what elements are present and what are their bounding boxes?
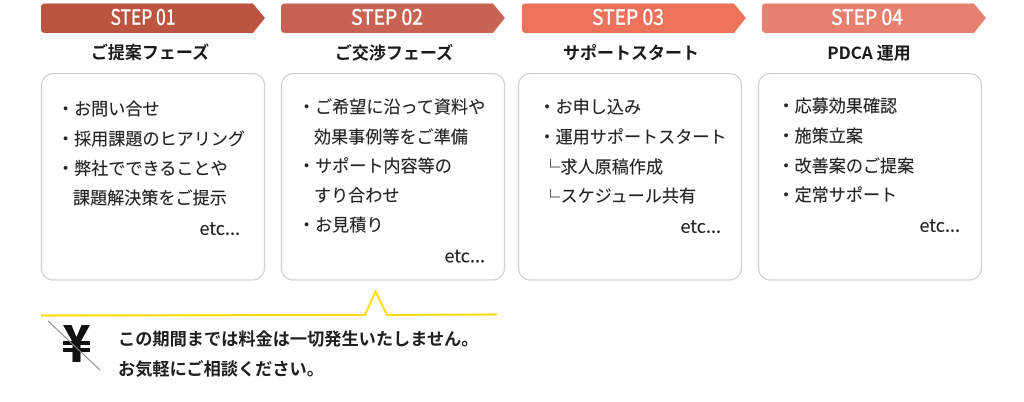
list: PDCA items: ・改善案のご提案: [778, 152, 914, 177]
list: PDCA items: ・応募効果確認: [778, 92, 897, 117]
bracket line with peak: [41, 292, 497, 316]
list: negotiation items: etc...: [445, 242, 485, 268]
list: proposal items: ・お問い合せ: [57, 95, 160, 120]
arrow banner: STEP 02: STEP 02: [351, 0, 423, 30]
panel: proposal phase: [42, 74, 264, 280]
list: support items: [538, 93, 727, 239]
panel: support start: [518, 74, 742, 280]
arrow banner: STEP 04: STEP 04: [831, 0, 903, 30]
panel: negotiation phase: [282, 74, 504, 280]
list: PDCA items: ・定常サポート: [778, 181, 897, 206]
step 4 column: [758, 0, 986, 280]
list: proposal items: ・採用課題のヒアリング: [57, 125, 245, 150]
list: proposal items: 課題解決策をご提示: [73, 184, 227, 209]
list: negotiation items: ・ご希望に沿って資料や: [298, 93, 485, 118]
list: support items: ・お申し込み: [538, 93, 641, 118]
arrow banner: STEP 01: STEP 01: [110, 0, 176, 30]
list: PDCA items: ・施策立案: [778, 122, 863, 147]
list: negotiation items: ・お見積り: [298, 211, 383, 236]
step 1 column: [41, 0, 265, 280]
list: proposal items: etc...: [200, 215, 240, 241]
arrow banner: STEP 03: STEP 03: [592, 0, 664, 30]
heading: negotiation phase: ご交渉フェーズ: [335, 39, 453, 64]
note: no fees during this period: お気軽にご相談ください。: [118, 355, 324, 380]
panel: PDCA operation: [758, 74, 982, 280]
list: negotiation items: すり合わせ: [314, 182, 399, 206]
heading: PDCA operation: PDCA 運用: [827, 39, 911, 64]
list: proposal items: ・弊社でできることや: [57, 154, 228, 180]
list: negotiation items: ・サポート内容等の: [298, 152, 452, 177]
heading: support start: サポートスタート: [563, 39, 699, 64]
list: PDCA items: etc...: [920, 212, 960, 238]
list: negotiation items: 効果事例等をご準備: [314, 123, 468, 148]
icon: crossed-out yen: [48, 321, 100, 370]
arrow banner: STEP 03: [522, 0, 746, 33]
note: no fees during this period: [118, 325, 478, 380]
arrow banner: STEP 01: [41, 0, 265, 33]
list: negotiation items: [298, 93, 485, 268]
list: support items: スケジュール共有: [560, 182, 696, 207]
heading: proposal phase: ご提案フェーズ: [91, 38, 209, 64]
list: proposal items: [57, 95, 245, 241]
arrow banner: STEP 04: [762, 0, 986, 33]
list: support items: ・運用サポートスタート: [538, 123, 727, 148]
list: support items: etc...: [681, 213, 721, 239]
list: PDCA items: [778, 92, 960, 238]
list: support items: 求人原稿作成: [560, 153, 663, 178]
step 2 column: [281, 0, 505, 280]
note: no fees during this period: この期間までは料金は一切発生いたしません。: [118, 325, 478, 350]
step 3 column: [518, 0, 746, 280]
arrow banner: STEP 02: [281, 0, 505, 33]
